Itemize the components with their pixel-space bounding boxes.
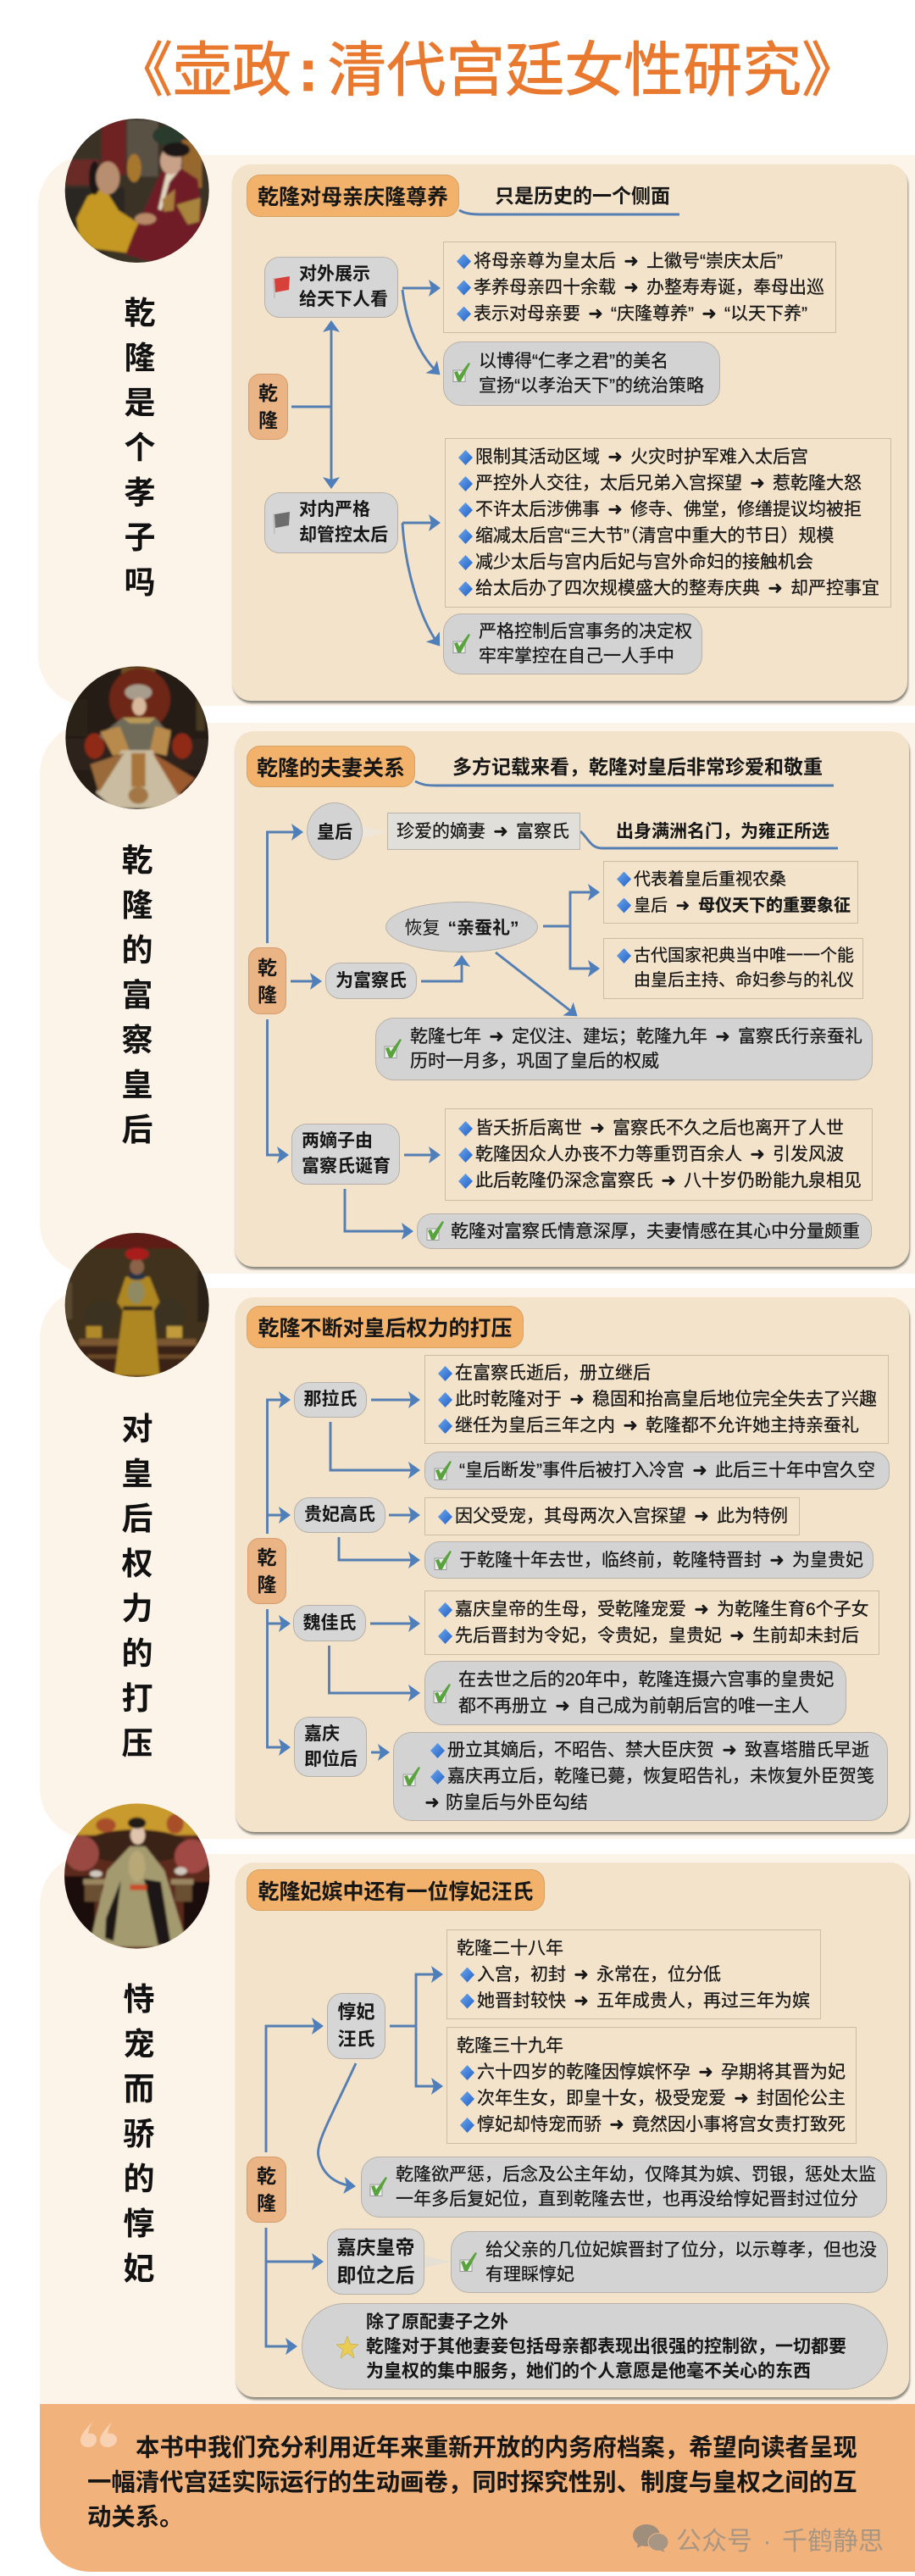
list: 对外展示 details: 孝养母亲四十余载 办整寿寿诞，奉母出巡 [474, 278, 824, 297]
box: 贵妃高氏 detail: ➜ [694, 1506, 709, 1526]
note: 多方记载来看: 多方记载来看，乾隆对皇后非常珍爱和敬重 [452, 756, 823, 778]
node: 嘉庆皇帝即位之后: 嘉庆皇帝 [337, 2236, 415, 2258]
vertical heading: 恃宠而骄的惇妃: 恃 [124, 1982, 154, 2017]
icon: red flag [273, 276, 290, 298]
vertical heading: 对皇后权力的打压: 压 [122, 1726, 152, 1761]
list: 农桑: 皇后 母仪天下的重要象征 [634, 897, 851, 915]
arrow: 乾隆 to summary [266, 2228, 296, 2346]
list: 对外展示 details: 表示对母亲要 “庆隆尊养” “以天下养” [474, 303, 807, 324]
conclusion: 册立其嫡后: 防皇后与外臣勾结 [446, 1793, 588, 1813]
node: 嘉庆即位后: 即位后 [304, 1749, 358, 1769]
panel: section 3 对皇后权力的打压 [40, 1288, 915, 1839]
vertical heading: 乾隆是个孝子吗 [124, 296, 156, 600]
box: 贵妃高氏 detail [424, 1497, 800, 1535]
conclusion: 乾隆七年 [375, 1018, 873, 1080]
icon: check [403, 1767, 420, 1786]
list: 对外展示 details: ➜ [624, 251, 639, 271]
list: 那拉氏 details [424, 1355, 889, 1444]
heading: 乾隆不断对皇后权力的打压 [247, 1306, 524, 1348]
conclusion: 皇贵妃: 于乾隆十年去世，临终前，乾隆特晋封 为皇贵妃 [459, 1551, 863, 1569]
list: 两嫡子 details: ➜ [661, 1170, 676, 1191]
arrow: 对外展示 to conclusion [402, 290, 439, 374]
node: 乾隆 [247, 1538, 286, 1604]
list: 那拉氏 details: ➜ [569, 1389, 585, 1409]
arrow: 乾隆 to 贵妃高氏 [268, 1514, 289, 1516]
conclusion: 乾隆七年: 历时一月多，巩固了皇后的权威 [410, 1052, 659, 1071]
node: 对外展示: 对外展示 [299, 264, 370, 284]
panel: section 2 乾隆的富察皇后 [40, 723, 915, 1274]
arrow: 两嫡子 to conclusion [345, 1189, 412, 1231]
conclusion: 册立其嫡后: ➜ [722, 1740, 737, 1760]
vertical heading: 恃宠而骄的惇妃 [124, 1982, 154, 2286]
vertical heading: 乾隆是个孝子吗: 子 [124, 520, 156, 555]
list: 两嫡子 details [445, 1108, 873, 1201]
conclusion: 乾隆七年: 乾隆七年 定仪注、建坛；乾隆九年 富察氏行亲蚕礼 [410, 1027, 862, 1046]
heading: 乾隆的夫妻关系: 乾隆的夫妻关系 [257, 756, 405, 780]
vertical heading: 对皇后权力的打压: 对 [122, 1412, 152, 1446]
note: 出身满洲名门: 出身满洲名门，为雍正所选 [616, 822, 829, 841]
conclusion: 不再册立: 都不再册立 自己成为前朝后宫的唯一主人 [458, 1696, 809, 1716]
vertical heading: 乾隆的富察皇后: 隆 [122, 888, 152, 923]
vertical heading: 乾隆的富察皇后 [122, 843, 152, 1147]
list: 乾隆三十九年: 次年生女，即皇十女，极受宠爱 封固伦公主 [477, 2089, 846, 2108]
box: 珍爱的嫡妻: ➜ [493, 820, 508, 841]
node: 对外展示: 给天下人看 [299, 290, 388, 309]
list: 乾隆二十八年 [446, 1929, 821, 2019]
arrow: 对内严格 to list [402, 522, 439, 524]
heading: 乾隆的夫妻关系 [247, 746, 415, 787]
heading: 乾隆对母亲庆隆尊养 [247, 175, 459, 217]
arrow: 对内严格 to conclusion [402, 523, 439, 645]
node: 惇妃汪氏 [327, 1993, 385, 2059]
conclusion: 册立其嫡后: 册立其嫡后，不昭告、禁大臣庆贺 致喜塔腊氏早逝 [447, 1740, 869, 1760]
node: 魏佳氏: 魏佳氏 [303, 1613, 356, 1632]
summary: 除了原配妻子之外: 乾隆对于其他妻妾包括母亲都表现出很强的控制欲，一切都要 [366, 2337, 846, 2356]
icon: check [369, 2177, 387, 2196]
list: 祀典: 由皇后主持、命妇参与的礼仪 [634, 971, 854, 990]
list: 乾隆二十八年: ➜ [574, 1964, 589, 1985]
list: 两嫡子 details: ➜ [590, 1118, 605, 1138]
node: 贵妃高氏 [294, 1497, 385, 1533]
arrow: 那拉氏 to list [371, 1399, 419, 1401]
conclusion: 乾隆七年: ➜ [715, 1026, 730, 1046]
icon: check [459, 2252, 477, 2272]
vertical heading: 恃宠而骄的惇妃: 惇 [124, 2207, 154, 2241]
node: 乾隆 [248, 947, 286, 1014]
conclusion: 皇后断发: “皇后断发”事件后被打入冷宫 此后三十年中宫久空 [459, 1461, 875, 1480]
icon: quotation mark [80, 2422, 117, 2447]
arrow: 乾隆 to 那拉氏 [268, 1400, 289, 1534]
list: 乾隆二十八年: 她晋封较快 五年成贵人，再过三年为嫔 [477, 1991, 810, 2010]
arrow: 亲蚕礼 to upper list [543, 892, 598, 926]
node: 乾隆: 乾 [258, 382, 278, 404]
vertical heading: 恃宠而骄的惇妃: 骄 [124, 2117, 154, 2151]
watermark: · [762, 2528, 771, 2556]
list: 两嫡子 details: ➜ [750, 1144, 765, 1164]
arrow: 贵妃高氏 to box [389, 1514, 419, 1516]
list: 乾隆二十八年: ➜ [574, 1990, 589, 2010]
node: 两嫡子: 两嫡子由 [302, 1131, 373, 1151]
node: 贵妃高氏: 贵妃高氏 [304, 1505, 375, 1524]
node: 对外展示 [264, 257, 398, 318]
icon: gray flag [273, 512, 290, 534]
summary: 除了原配妻子之外 [302, 2303, 888, 2390]
vertical heading: 对皇后权力的打压: 权 [122, 1546, 152, 1581]
conclusion: 乾隆七年: ➜ [489, 1026, 504, 1046]
list: 农桑: 代表着皇后重视农桑 [634, 869, 786, 888]
icon: star [336, 2336, 358, 2359]
panel: 乾隆不断对皇后权力的打压 mind map [236, 1297, 909, 1832]
vertical heading: 乾隆的富察皇后: 察 [122, 1023, 152, 1058]
photo: empress on throne [65, 666, 208, 809]
vertical heading: 乾隆是个孝子吗: 乾 [124, 296, 156, 330]
vertical heading: 恃宠而骄的惇妃: 妃 [124, 2251, 154, 2286]
list: 对外展示 details: ➜ [588, 303, 603, 324]
list: 乾隆三十九年: 乾隆三十九年 [457, 2036, 563, 2056]
list: 对外展示 details: ➜ [702, 303, 717, 324]
node: 恢复亲蚕礼: “亲蚕礼” [447, 919, 518, 938]
list: 魏佳氏 details: ➜ [729, 1625, 745, 1646]
list: 对外展示 details: ➜ [624, 276, 639, 297]
list: 对内严格 details: 限制其活动区域 火灾时护军难入太后宫 [475, 447, 808, 467]
node: 魏佳氏 [293, 1605, 366, 1641]
vertical heading: 乾隆是个孝子吗: 是 [124, 386, 156, 420]
title: 《壶政:清代宫廷女性研究》 [114, 23, 861, 108]
conclusion: 乾隆欲严惩: 乾隆欲严惩，后念及公主年幼，仅降其为嫔、罚银，惩处太监 [396, 2165, 876, 2185]
arrow: 亲蚕礼 to lower list [570, 926, 598, 969]
box: 珍爱的嫡妻 [387, 813, 580, 850]
list: 农桑 [603, 861, 858, 924]
quote text: 本书中我们充分利用近年来重新开放的内务府档案，希望向读者呈现 [136, 2434, 857, 2462]
vertical heading: 对皇后权力的打压: 后 [122, 1502, 152, 1536]
box: 珍爱的嫡妻: 珍爱的嫡妻 富察氏 [396, 822, 569, 841]
vertical heading: 乾隆是个孝子吗: 孝 [124, 475, 156, 510]
conclusion: 给父亲的几位妃嫔 [451, 2231, 888, 2293]
icon: check [434, 1551, 452, 1570]
list: 对外展示 details [443, 242, 836, 333]
node: 乾隆: 乾 [258, 956, 277, 978]
quote text: 一幅清代宫廷实际运行的生动画卷，同时探究性别、制度与皇权之间的互 [87, 2469, 857, 2496]
list: 乾隆三十九年: ➜ [698, 2062, 713, 2082]
vertical heading: 乾隆的富察皇后: 皇 [122, 1068, 152, 1102]
vertical heading: 对皇后权力的打压: 打 [122, 1681, 152, 1716]
conclusion: 不再册立 [424, 1661, 846, 1725]
arrow: 乾隆 to 嘉庆皇帝即位之后 [266, 2261, 322, 2262]
conclusion: 严格控制后宫: 牢牢掌控在自己一人手中 [479, 647, 674, 666]
icon: check [434, 1461, 452, 1480]
vertical heading: 对皇后权力的打压: 力 [122, 1591, 152, 1626]
node: 嘉庆皇帝即位之后: 即位之后 [337, 2264, 415, 2286]
node: 乾隆: 隆 [258, 1574, 276, 1596]
node: 乾隆 [247, 2157, 286, 2223]
conclusion: 册立其嫡后 [393, 1732, 888, 1821]
vertical heading: 乾隆的富察皇后: 乾 [122, 843, 152, 878]
icon: check [434, 1684, 451, 1703]
conclusion: 严格控制后宫: 严格控制后宫事务的决定权 [479, 622, 692, 641]
vertical heading: 乾隆是个孝子吗: 个 [124, 430, 156, 465]
list: 乾隆三十九年: 惇妃却恃宠而骄 竟然因小事将宫女责打致死 [477, 2115, 846, 2135]
list: 两嫡子 details: 乾隆因众人办丧不力等重罚百余人 引发风波 [475, 1145, 844, 1164]
arrow: 惇妃汪氏 to conclusion [318, 2063, 356, 2186]
list: 乾隆三十九年: ➜ [734, 2088, 749, 2108]
conclusion: 给父亲的几位妃嫔: 有理睬惇妃 [485, 2264, 574, 2285]
vertical heading: 乾隆的富察皇后: 富 [122, 978, 152, 1013]
arrow: 那拉氏 to conclusion [330, 1422, 419, 1470]
photo: 惇妃 on throne [64, 1803, 210, 1949]
conclusion: 皇后断发 [424, 1452, 890, 1490]
connector: 嘉庆皇帝 to conclusion [424, 2256, 451, 2268]
arrow: underline for 出身满洲名门 [580, 831, 838, 848]
node: 乾隆 [248, 374, 288, 440]
vertical heading: 乾隆的富察皇后: 后 [122, 1113, 152, 1147]
conclusion: 情意深厚: 乾隆对富察氏情意深厚，夫妻情感在其心中分量颇重 [451, 1222, 860, 1241]
arrow: 对外展示 to list [402, 287, 439, 289]
arrow: 惇妃汪氏 to 乾隆二十八年 [390, 1974, 441, 2026]
list: 对内严格 details: 给太后办了四次规模盛大的整寿庆典 却严控事宜 [475, 579, 879, 598]
arrow: 嘉庆即位后 to conclusion [371, 1752, 388, 1753]
conclusion: 皇贵妃: ➜ [769, 1549, 785, 1569]
conclusion: 皇贵妃 [424, 1541, 873, 1579]
vertical heading: 对皇后权力的打压 [122, 1412, 152, 1761]
quote text [87, 2434, 857, 2531]
arrow: 乾隆 to 嘉庆即位后 [268, 1609, 289, 1747]
arrow: 乾隆 to 惇妃汪氏 [266, 2026, 322, 2152]
list: 乾隆三十九年 [446, 2027, 857, 2144]
footer: quote panel [40, 2404, 915, 2572]
vertical heading: 乾隆是个孝子吗: 吗 [124, 565, 156, 600]
node: 嘉庆即位后: 嘉庆 [304, 1724, 340, 1744]
conclusion: 册立其嫡后: ➜ [424, 1792, 440, 1813]
arrow: 魏佳氏 to list [370, 1623, 419, 1624]
arrow: 两嫡子 to list [404, 1154, 439, 1156]
node: 那拉氏: 那拉氏 [303, 1390, 358, 1409]
node: 嘉庆即位后 [294, 1717, 367, 1777]
arrow: 乾隆 to 为富察氏 [291, 980, 320, 982]
node: 两嫡子 [291, 1124, 400, 1185]
list: 对内严格 details: 减少太后与宫内后妃与宫外命妇的接触机会 [475, 552, 813, 572]
node: 乾隆: 乾 [257, 2165, 276, 2187]
summary: 除了原配妻子之外: 为皇权的集中服务，她们的个人意愿是他毫不关心的东西 [366, 2361, 811, 2381]
icon: check [427, 1221, 444, 1241]
note: 只是历史的一个侧面: 只是历史的一个侧面 [495, 185, 670, 207]
quote text: 动关系。 [87, 2504, 184, 2531]
arrow: 贵妃高氏 to conclusion [339, 1537, 419, 1560]
list: 两嫡子 details: 皆夭折后离世 富察氏不久之后也离开了人世 [475, 1119, 844, 1138]
list: 对内严格 details: ➜ [607, 499, 623, 519]
list: 魏佳氏 details: 先后晋封为令妃，令贵妃，皇贵妃 生前却未封后 [455, 1626, 859, 1646]
node: 乾隆: 隆 [258, 983, 277, 1005]
node: 乾隆: 乾 [258, 1546, 276, 1568]
connector: 皇后 to 珍爱的嫡妻 [363, 826, 387, 838]
list: 祀典 [603, 938, 863, 999]
list: 那拉氏 details: ➜ [623, 1415, 638, 1435]
arrow: 乾隆 to 皇后 [268, 832, 302, 943]
node: 恢复亲蚕礼: 恢复 [405, 919, 441, 938]
list: 对外展示 details: 将母亲尊为皇太后 上徽号“崇庆太后” [474, 251, 783, 271]
conclusion: 仁孝之君 [443, 341, 720, 406]
photo: emperor standing [64, 1233, 209, 1377]
vertical heading: 乾隆是个孝子吗: 隆 [124, 341, 156, 375]
icon: check [452, 363, 470, 382]
node: 对内严格 [264, 492, 398, 553]
vertical heading: 恃宠而骄的惇妃: 的 [124, 2162, 154, 2196]
icon: check [385, 1039, 402, 1058]
list: 那拉氏 details: 继任为皇后三年之内 乾隆都不允许她主持亲蚕礼 [455, 1416, 859, 1435]
list: 乾隆三十九年: ➜ [609, 2114, 624, 2135]
node: 那拉氏 [294, 1382, 367, 1418]
node: 嘉庆皇帝即位之后 [327, 2229, 424, 2295]
conclusion: 乾隆欲严惩: 一年多后复妃位，直到乾隆去世，也再没给惇妃晋封过位分 [396, 2190, 858, 2209]
node: 惇妃汪氏: 汪氏 [337, 2029, 374, 2050]
list: 乾隆二十八年: 乾隆二十八年 [457, 1939, 563, 1957]
vertical heading: 乾隆的富察皇后: 的 [122, 933, 152, 968]
list: 乾隆三十九年: 六十四岁的乾隆因惇嫔怀孕 孕期将其晋为妃 [477, 2062, 846, 2082]
conclusion: 仁孝之君: 以博得“仁孝之君”的美名 [479, 352, 668, 371]
arrow: 乾隆 to 对外展示 [291, 322, 331, 407]
list: 魏佳氏 details: 嘉庆皇帝的生母，受乾隆宠爱 为乾隆生育6个子女 [455, 1600, 869, 1619]
conclusion: 不再册立: ➜ [555, 1696, 570, 1716]
summary: 除了原配妻子之外: 除了原配妻子之外 [366, 2312, 508, 2332]
icon: check [452, 634, 470, 653]
node: 皇后: 皇后 [317, 823, 352, 842]
list: 对内严格 details: 严控外人交往，太后兄弟入宫探望 惹乾隆大怒 [475, 474, 862, 493]
arrow: heading underline [415, 781, 834, 786]
list: 对内严格 details [445, 438, 891, 608]
node: 两嫡子: 富察氏诞育 [302, 1157, 391, 1176]
heading: 乾隆不断对皇后权力的打压: 乾隆不断对皇后权力的打压 [258, 1317, 512, 1341]
conclusion: 情意深厚 [417, 1213, 872, 1249]
list: 农桑: ➜ [676, 895, 690, 915]
list: 对内严格 details: ➜ [750, 473, 765, 493]
conclusion: 仁孝之君: 宣扬“以孝治天下”的统治策略 [479, 376, 704, 396]
arrow: heading underline [459, 210, 679, 214]
node: 对内严格: 却管控太后 [299, 525, 388, 545]
list: 乾隆二十八年: 入宫，初封 永常在，位分低 [477, 1964, 721, 1985]
arrow: 乾隆 to 对内严格 [330, 407, 332, 487]
watermark: 公众号 千鹤静思 [676, 2520, 884, 2557]
heading: 乾隆对母亲庆隆尊养: 乾隆对母亲庆隆尊养 [258, 186, 448, 209]
heading: 乾隆妃嫔中还有一位惇妃汪氏: 乾隆妃嫔中还有一位惇妃汪氏 [258, 1879, 534, 1903]
list: 对内严格 details: 不许太后涉佛事 修寺、佛堂，修缮提议均被拒 [475, 500, 862, 519]
node: 恢复亲蚕礼 [385, 902, 538, 952]
list: 那拉氏 details: 在富察氏逝后，册立继后 [455, 1363, 651, 1383]
vertical heading: 恃宠而骄的惇妃: 宠 [124, 2027, 154, 2062]
node: 对内严格: 对内严格 [299, 500, 370, 519]
conclusion: 乾隆欲严惩 [361, 2157, 887, 2218]
arrow: 魏佳氏 to conclusion [329, 1646, 419, 1693]
node: 为富察氏 [325, 963, 417, 999]
list: 对内严格 details: ➜ [607, 447, 623, 467]
conclusion: 严格控制后宫 [443, 613, 702, 675]
vertical heading: 对皇后权力的打压: 的 [122, 1636, 152, 1671]
node: 乾隆: 隆 [257, 2192, 276, 2214]
conclusion: 不再册立: 在去世之后的20年中，乾隆连摄六宫事的皇贵妃 [458, 1670, 834, 1690]
panel: section 4 恃宠而骄的惇妃 [40, 1854, 915, 2404]
conclusion: 册立其嫡后: 嘉庆再立后，乾隆已薨，恢复昭告礼，未恢复外臣贺笺 [447, 1767, 874, 1786]
heading: 乾隆妃嫔中还有一位惇妃汪氏 [247, 1869, 545, 1911]
panel: 乾隆对母亲庆隆尊养 mind map [232, 164, 907, 701]
conclusion: 给父亲的几位妃嫔: 给父亲的几位妃嫔晋封了位分，以示尊孝，但也没 [485, 2240, 877, 2259]
arrow: 惇妃汪氏 to 乾隆三十九年 [416, 2026, 441, 2086]
photo: 乾隆 and his mother [64, 119, 209, 263]
arrow: 为富察氏 to 亲蚕礼 [421, 957, 462, 981]
list: 魏佳氏 details: ➜ [694, 1599, 709, 1619]
panel: 乾隆的夫妻关系 mind map [235, 731, 909, 1267]
node: 惇妃汪氏: 惇妃 [337, 2001, 374, 2023]
list: 对内严格 details: 缩减太后宫“三大节”（清宫中重大的节日）规模 [475, 526, 834, 546]
arrow: 乾隆 to 魏佳氏 [268, 1623, 289, 1624]
list: 魏佳氏 details [424, 1591, 879, 1655]
arrow: 亲蚕礼 to result [496, 952, 576, 1015]
box: 贵妃高氏 detail: 因父受宠，其母两次入宫探望 此为特例 [455, 1507, 788, 1526]
node: 乾隆: 隆 [258, 409, 278, 431]
node: 皇后 [307, 802, 363, 860]
panel: section 1 乾隆是个孝子吗 [38, 155, 915, 706]
list: 祀典: 古代国家祀典当中唯一一个能 [634, 947, 854, 965]
arrow: 乾隆 to 两嫡子 [268, 1019, 287, 1155]
icon: wechat [633, 2524, 668, 2552]
node: 为富察氏: 为富察氏 [336, 971, 407, 990]
list: 那拉氏 details: 此时乾隆对于 稳固和抬高皇后地位完全失去了兴趣 [455, 1390, 877, 1409]
list: 两嫡子 details: 此后乾隆仍深念富察氏 八十岁仍盼能九泉相见 [475, 1171, 862, 1191]
panel: 乾隆妃嫔中还有一位惇妃汪氏 mind map [236, 1863, 909, 2397]
vertical heading: 对皇后权力的打压: 皇 [122, 1457, 152, 1491]
conclusion: 皇后断发: ➜ [692, 1460, 707, 1480]
list: 对内严格 details: ➜ [768, 578, 783, 598]
vertical heading: 恃宠而骄的惇妃: 而 [124, 2072, 154, 2107]
